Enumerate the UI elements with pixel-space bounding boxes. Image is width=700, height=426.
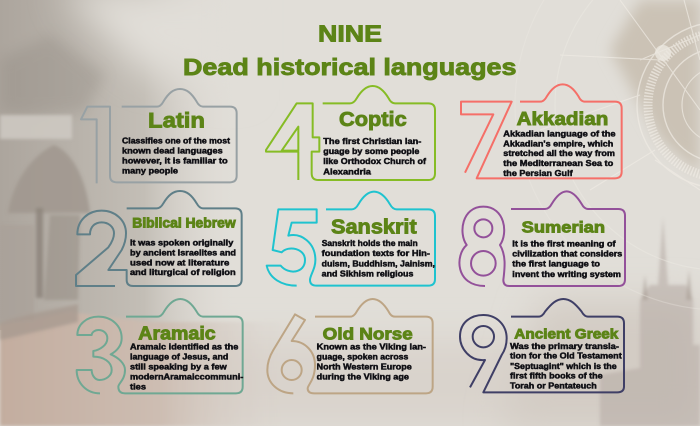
body text: invent the writing system bbox=[512, 269, 621, 279]
body text bbox=[323, 136, 426, 176]
body text: guage, spoken across bbox=[317, 351, 409, 361]
body text: civilization that considers bbox=[512, 249, 623, 259]
body text: foundation texts for Hin- bbox=[322, 248, 430, 258]
body text: Known as the Viking lan- bbox=[317, 341, 426, 351]
body text: however, it is familiar to bbox=[122, 156, 228, 166]
body text: It was spoken originally bbox=[130, 238, 234, 248]
body text: the first language to bbox=[512, 258, 600, 268]
heading: Akkadian bbox=[517, 109, 608, 129]
panel: 3 Aramaic bbox=[77, 299, 243, 393]
panel: 2 Biblical Hebrew bbox=[76, 191, 242, 286]
body text: and Sikhism religious bbox=[322, 269, 414, 279]
body text: known dead languages bbox=[122, 146, 223, 156]
body text: duism, Buddhism, Jainism, bbox=[322, 258, 435, 268]
body text: by ancient Israelites and bbox=[130, 247, 236, 257]
heading: Old Norse bbox=[323, 324, 413, 343]
body text bbox=[512, 239, 623, 279]
body text: guage by some people bbox=[323, 146, 420, 156]
body text: language of Jesus, and bbox=[130, 351, 228, 361]
body text: tion for the Old Testament bbox=[510, 351, 622, 361]
outline: numeral 9 and card bbox=[460, 299, 624, 392]
body text bbox=[503, 129, 616, 178]
body text: Akkadian language of the bbox=[503, 129, 616, 139]
heading: Sumerian bbox=[522, 220, 605, 237]
panel: 4 Coptic bbox=[266, 86, 435, 180]
title: NINE bbox=[318, 21, 382, 47]
body text bbox=[317, 341, 426, 381]
title bbox=[183, 21, 516, 80]
heading: Ancient Greek bbox=[514, 325, 619, 341]
body text: Classifies one of the most bbox=[122, 136, 230, 146]
heading: Coptic bbox=[339, 109, 407, 131]
panel: 6 Old Norse bbox=[267, 299, 433, 393]
body text: used now at literature bbox=[130, 257, 230, 267]
body text: during the Viking age bbox=[317, 371, 409, 381]
body text: Akkadian's empire, which bbox=[503, 138, 613, 148]
body text: Sanskrit holds the main bbox=[322, 238, 418, 248]
body text: like Orthodox Church of bbox=[323, 156, 426, 166]
body text: Aramaic identified as the bbox=[130, 341, 239, 351]
heading: Aramaic bbox=[138, 323, 216, 343]
panel: 9 Ancient Greek bbox=[460, 299, 624, 392]
heading: Biblical Hebrew bbox=[132, 215, 236, 230]
body text: It is the first meaning of bbox=[512, 239, 616, 249]
outline: numeral 3 and card bbox=[77, 299, 243, 393]
body text: The first Christian lan- bbox=[323, 136, 421, 146]
body text: first fifth books of the bbox=[510, 371, 603, 381]
body text bbox=[322, 238, 435, 279]
body text: and liturgical of religion bbox=[130, 267, 236, 277]
panel: 1 Latin bbox=[81, 89, 237, 183]
body text: Was the primary transla- bbox=[510, 341, 619, 351]
body text: "Septuagint" which is the bbox=[510, 361, 617, 371]
heading: Latin bbox=[148, 108, 205, 132]
body text: many people bbox=[122, 166, 178, 176]
outline: numeral 5 and card bbox=[267, 192, 435, 286]
outline: numeral 2 and card bbox=[76, 191, 242, 286]
body text: modernAramaiccommuni- bbox=[130, 371, 243, 381]
body text: the Persian Gulf bbox=[503, 168, 573, 178]
heading: Sanskrit bbox=[331, 216, 417, 238]
outline: numeral 4 and card bbox=[266, 86, 435, 180]
body text: the Mediterranean Sea to bbox=[503, 158, 613, 168]
panel: 8 Sumerian bbox=[459, 191, 625, 286]
body text: stretched all the way from bbox=[503, 148, 615, 158]
outline: numeral 6 and card bbox=[267, 299, 433, 393]
panel: 5 Sanskrit bbox=[267, 192, 435, 286]
body text: Alexandria bbox=[323, 166, 371, 176]
outline: numeral 1 and card bbox=[81, 89, 237, 183]
body text bbox=[130, 341, 243, 391]
body text: still speaking by a few bbox=[130, 361, 227, 371]
body text: ties bbox=[130, 381, 146, 391]
body text bbox=[122, 136, 230, 176]
outline: numeral 7 and card bbox=[461, 84, 622, 178]
body text bbox=[130, 238, 236, 277]
body text: Torah or Pentateuch bbox=[510, 380, 597, 390]
outline: numeral 8 and card bbox=[459, 191, 625, 286]
body text bbox=[510, 341, 622, 390]
panel: 7 Akkadian bbox=[461, 84, 622, 178]
body text: North Western Europe bbox=[317, 361, 412, 371]
title: Dead historical languages bbox=[183, 54, 516, 80]
